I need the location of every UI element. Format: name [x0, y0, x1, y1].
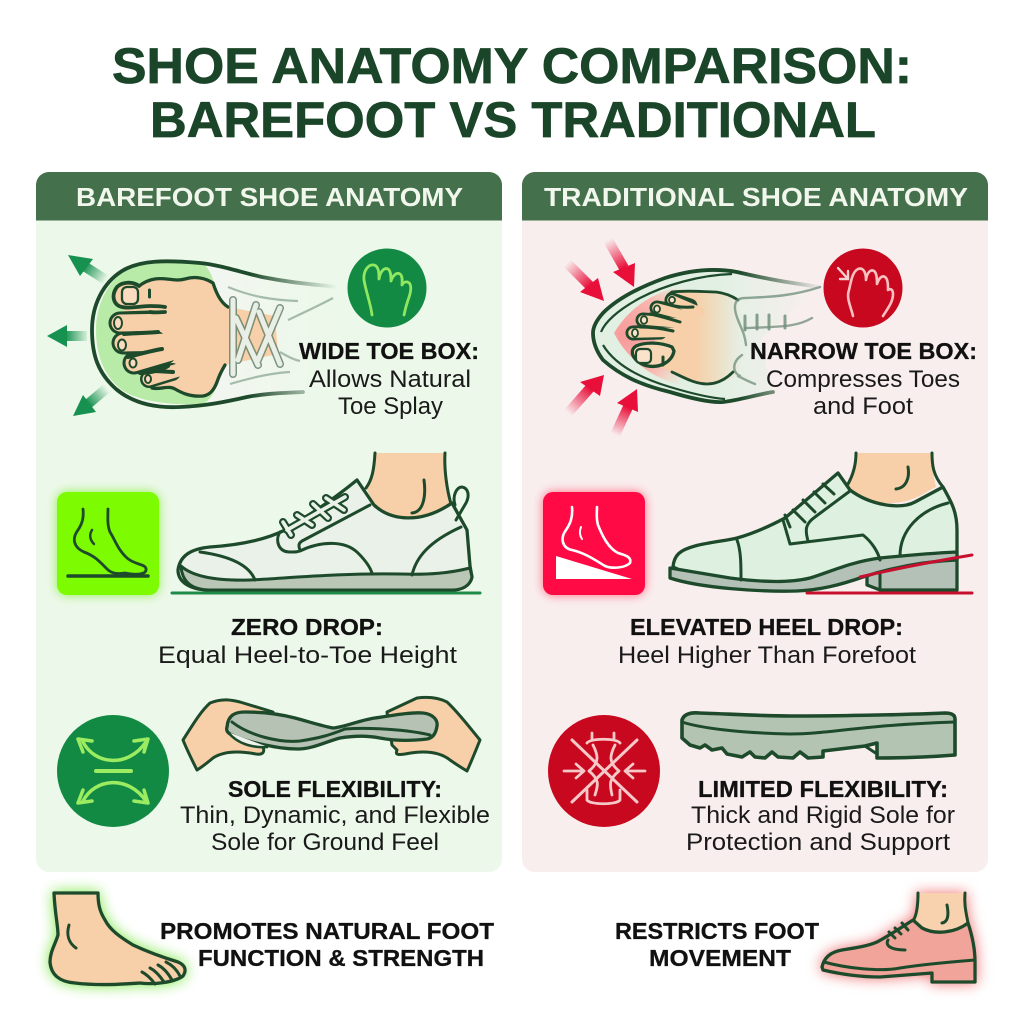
text: wide toe box: WIDE TOE BOX: [299, 338, 479, 364]
laces [785, 484, 834, 527]
icon: squeezed foot circle [824, 248, 902, 328]
text: limited flexibility: LIMITED FLEXIBILITY: [698, 776, 948, 802]
text: elevated heel drop [618, 614, 916, 669]
sole [670, 552, 957, 591]
text: sole flexibility: Thin, Dynamic, and Flexible [180, 802, 490, 829]
big toe [113, 283, 165, 312]
panel heading: barefoot [36, 172, 502, 220]
text: narrow toe box [750, 338, 977, 420]
upper [673, 473, 957, 585]
text: limited flexibility [686, 776, 955, 856]
text: promotes natural foot function [160, 918, 494, 971]
icon: zero drop foot tile [57, 492, 159, 595]
text: narrow toe box: and Foot [813, 393, 913, 420]
title [112, 38, 912, 148]
text: limited flexibility: Protection and Support [686, 829, 950, 856]
small toes [632, 297, 700, 337]
icon: spread foot circle [348, 248, 426, 328]
text: zero drop [158, 614, 457, 669]
text: narrow toe box: NARROW TOE BOX: [750, 338, 977, 364]
foot body [120, 278, 278, 396]
text: sole flexibility: Sole for Ground Feel [211, 829, 439, 856]
text: promotes natural foot function: PROMOTES NATURAL FOOT [160, 918, 494, 944]
illustration: zero drop sneaker [178, 453, 472, 590]
icon: healthy bare foot [50, 893, 185, 985]
text: limited flexibility: Thick and Rigid Sole for [691, 802, 955, 829]
red drop lines [807, 555, 972, 593]
text: wide toe box: Toe Splay [338, 393, 443, 420]
laces and throat [734, 287, 820, 384]
text: elevated heel drop: Heel Higher Than Forefoot [618, 642, 916, 669]
shoe edge lines [228, 287, 333, 384]
heel loop [454, 487, 468, 520]
big toe [632, 343, 674, 366]
heel block [867, 555, 957, 590]
panel heading: traditional: TRADITIONAL SHOE ANATOMY [544, 182, 968, 212]
illustration: elevated heel dress shoe [670, 453, 957, 591]
icon: raised heel foot tile [543, 492, 645, 595]
illustration: hands bending flexible sole [183, 697, 480, 771]
text: zero drop: ZERO DROP: [231, 614, 383, 640]
text: wide toe box: Allows Natural [309, 366, 471, 393]
text: zero drop: Equal Heel-to-Toe Height [158, 642, 457, 669]
panel heading: traditional [522, 172, 988, 220]
title: SHOE ANATOMY COMPARISON: [112, 38, 912, 94]
arrows: toes compressed inward [567, 240, 638, 435]
laces [233, 300, 280, 374]
panel: barefoot shoe anatomy [36, 172, 502, 872]
text: wide toe box [299, 338, 479, 420]
panel: traditional shoe anatomy [522, 172, 988, 872]
icon: restrictive shoe [822, 893, 975, 982]
text: restricts foot movement: RESTRICTS FOOT [615, 918, 819, 944]
text: promotes natural foot function: FUNCTION & STRENGTH [198, 945, 484, 971]
illustration: rigid thick sole [682, 713, 955, 758]
text: sole flexibility [180, 776, 490, 856]
icon: flexibility arrows circle [57, 715, 169, 827]
illustration: narrow toe box top view [593, 270, 820, 402]
text: sole flexibility: SOLE FLEXIBILITY: [228, 776, 442, 802]
title: BAREFOOT VS TRADITIONAL [150, 92, 876, 148]
text: restricts foot movement [615, 918, 819, 971]
arrows: toes splay outward [47, 255, 107, 416]
text: narrow toe box: Compresses Toes [766, 366, 960, 393]
laces [283, 497, 345, 535]
text: restricts foot movement: MOVEMENT [649, 945, 791, 971]
small toes [114, 317, 185, 383]
ground line: zero drop [172, 592, 480, 594]
illustration: wide toe box top view [92, 261, 337, 407]
text: elevated heel drop: ELEVATED HEEL DROP: [630, 614, 903, 640]
icon: limited flexibility circle [548, 715, 660, 827]
panel heading: barefoot: BAREFOOT SHOE ANATOMY [76, 182, 463, 212]
